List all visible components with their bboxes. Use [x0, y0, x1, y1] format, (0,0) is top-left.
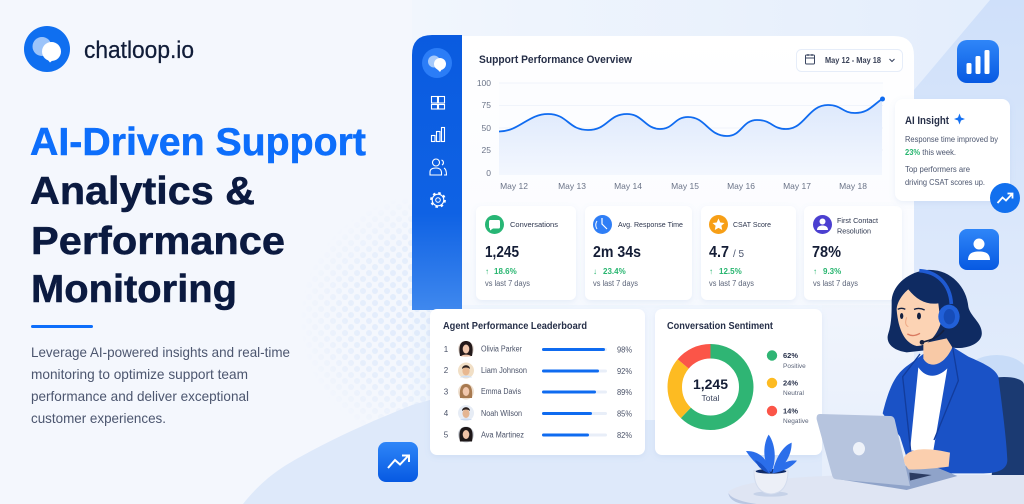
row 5: 5: [444, 430, 449, 440]
kpi card: conversations: [476, 206, 576, 300]
y axis labels: 50: [482, 123, 491, 133]
facial features: [898, 308, 925, 336]
divider: [31, 325, 93, 328]
donut total: Total: [702, 393, 720, 403]
kpi card: first contact resolution: [804, 206, 902, 300]
row 2: 92%: [617, 367, 632, 376]
kpi card: csat score: vs last 7 days: [709, 279, 754, 288]
legend: 14%: [783, 406, 798, 416]
shirt: [910, 367, 947, 451]
panel: agent performance leaderboard: [430, 309, 645, 455]
logo: [24, 26, 70, 72]
legend: Positive: [783, 363, 806, 370]
kpi card: first contact resolution: 78%: [812, 244, 841, 261]
description: customer experiences.: [31, 410, 166, 426]
callout: ai insight: driving CSAT scores up.: [905, 178, 985, 187]
date picker: [796, 50, 902, 72]
callout: ai insight: AI Insight: [905, 115, 949, 127]
row 1: 98%: [617, 346, 632, 354]
kpi card: csat score: 12.5%: [719, 267, 742, 276]
panel: conversation sentiment: [655, 309, 822, 455]
callout: ai insight: Response time improved by: [905, 135, 998, 144]
kpi card: csat score: / 5: [733, 249, 745, 260]
x axis labels: May 14: [614, 181, 642, 191]
donut total: 1,245: [693, 376, 728, 392]
laptop: [817, 414, 957, 490]
headline: Performance: [31, 220, 285, 263]
description: monitoring to optimize support team: [31, 366, 248, 382]
callout: ai insight: Top performers are: [905, 165, 971, 174]
kpi card: csat score: ↑: [709, 267, 713, 276]
kpi card: average response time: ↓: [593, 267, 597, 276]
chart title: Support Performance Overview: [479, 54, 632, 66]
row 4: Noah Wilson: [481, 409, 522, 418]
x axis labels: May 18: [839, 181, 867, 191]
sidebar: [412, 35, 462, 310]
date picker: May 12 - May 18: [825, 56, 882, 65]
x axis labels: [500, 181, 867, 191]
jacket: [883, 347, 1007, 473]
icon: trend badge: [990, 183, 1020, 213]
kpi card: conversations: 18.6%: [494, 267, 517, 276]
y axis labels: 0: [486, 168, 491, 178]
description: [31, 344, 290, 426]
icon: dashboard: [432, 96, 444, 109]
neck: [923, 338, 952, 365]
description: Leverage AI-powered insights and real-time: [31, 344, 290, 360]
row 2: [444, 362, 632, 378]
legend: [767, 350, 809, 425]
row 5: [444, 426, 632, 442]
kpi card: conversations: 1,245: [485, 244, 519, 261]
kpi card: average response time: [585, 206, 692, 300]
headline: [30, 121, 366, 311]
donut total: [693, 376, 728, 403]
kpi card: average response time: 23.4%: [603, 267, 626, 276]
kpi card: csat score: CSAT Score: [733, 220, 771, 229]
kpi card: average response time: Avg. Response Time: [618, 220, 683, 229]
kpi card: first contact resolution: vs last 7 days: [813, 279, 858, 288]
kpi card: conversations: Conversations: [510, 220, 558, 229]
legend: 24%: [783, 378, 798, 388]
row 3: 3: [444, 388, 449, 396]
x axis labels: May 16: [727, 181, 755, 191]
kpi card: first contact resolution: First Contact: [837, 216, 879, 225]
row 3: [444, 384, 632, 400]
panel: agent performance leaderboard: Agent Performance Leaderboard: [443, 320, 587, 332]
panel: conversation sentiment: Conversation Sentiment: [667, 320, 773, 332]
row 2: Liam Johnson: [481, 366, 527, 375]
icon tile: trend arrow: [378, 442, 418, 482]
row 5: Ava Martinez: [481, 430, 524, 440]
row 4: 85%: [617, 410, 632, 418]
icon tile: bar chart: [957, 40, 999, 83]
brand name: chatloop.io: [84, 37, 194, 64]
kpi card: first contact resolution: ↑: [813, 267, 817, 276]
kpi card: first contact resolution: Resolution: [837, 226, 871, 236]
dashboard panel: [462, 36, 914, 305]
chair: [965, 355, 1024, 477]
icon: settings: [431, 193, 445, 207]
hand: [904, 449, 950, 470]
icon: users: [430, 159, 446, 175]
row 5: 82%: [617, 431, 632, 440]
legend: 62%: [783, 351, 798, 360]
legend: Negative: [783, 418, 809, 425]
row 3: Emma Davis: [481, 387, 521, 396]
y axis labels: 100: [477, 78, 491, 88]
illustration: desk, agent and laptop: [728, 270, 1024, 504]
icon: sidebar logo: [422, 48, 452, 78]
description: performance and deliver exceptional: [31, 388, 249, 404]
x axis labels: May 12: [500, 181, 528, 191]
x axis labels: May 13: [558, 181, 586, 191]
icon tile: person: [959, 229, 999, 270]
headline: Monitoring: [31, 268, 237, 311]
legend: Neutral: [783, 390, 805, 397]
y axis labels: [477, 78, 491, 178]
hair: [888, 270, 982, 352]
background: [243, 0, 1024, 504]
desk: [728, 475, 1024, 504]
agent: [883, 270, 1007, 473]
row 1: [444, 341, 632, 357]
row 1: Olivia Parker: [481, 344, 522, 354]
kpi card: conversations: ↑: [485, 267, 489, 276]
kpi card: csat score: 4.7: [709, 244, 729, 261]
y axis labels: 25: [482, 145, 491, 155]
line chart: [477, 78, 885, 191]
x axis labels: May 15: [671, 181, 699, 191]
row 1: 1: [444, 345, 449, 354]
icon: calendar: [806, 54, 814, 64]
callout: ai insight: [895, 99, 1010, 201]
kpi card: average response time: vs last 7 days: [593, 279, 638, 288]
headline: AI-Driven Support: [30, 121, 366, 164]
callout: ai insight: 23% this week.: [905, 148, 956, 157]
icon: bars: [432, 128, 444, 142]
row 4: [444, 405, 632, 421]
y axis labels: 75: [482, 100, 491, 110]
kpi card: average response time: 2m 34s: [593, 244, 641, 261]
headline: Analytics &: [30, 170, 255, 213]
plant: [746, 435, 797, 497]
headset: [919, 271, 960, 345]
x axis labels: May 17: [783, 181, 811, 191]
row 4: 4: [444, 409, 449, 418]
donut chart: [675, 351, 746, 423]
row 2: 2: [444, 366, 449, 375]
face: [897, 289, 941, 346]
kpi card: conversations: vs last 7 days: [485, 279, 530, 288]
row 3: 89%: [617, 388, 632, 397]
kpi card: csat score: [701, 206, 796, 300]
lapels: [903, 347, 958, 451]
kpi card: first contact resolution: 9.3%: [823, 267, 841, 276]
